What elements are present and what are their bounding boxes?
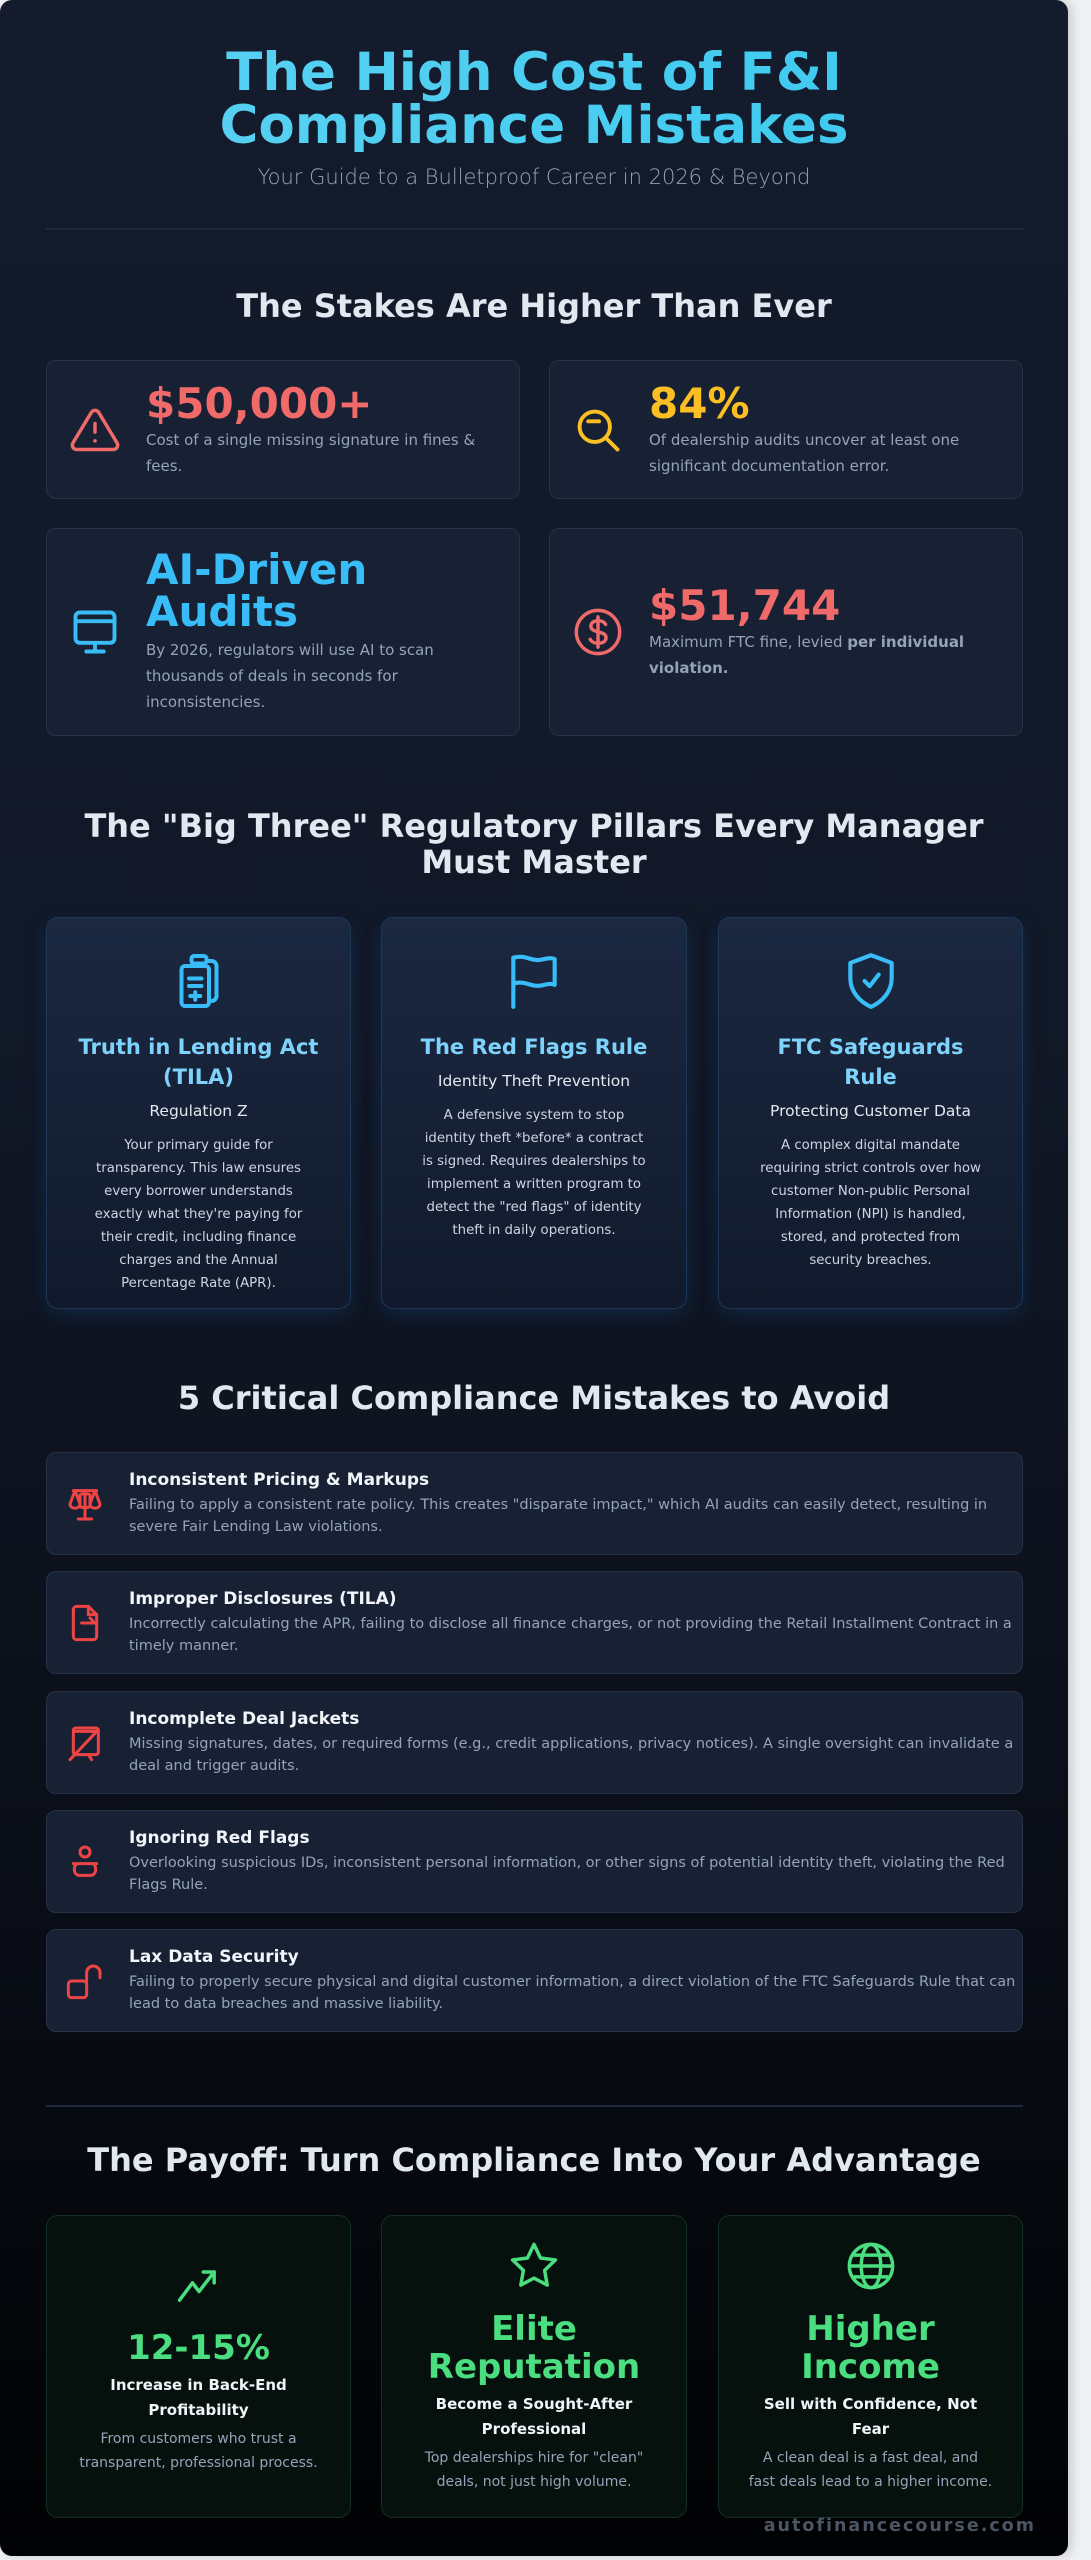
subtitle: Your Guide to a Bulletproof Career in 2026 & Beyond [258,165,810,189]
pillar: red flags: The Red Flags Rule [421,1035,647,1059]
payoff: income: Sell with Confidence, Not [764,2394,977,2412]
heading: payoff: The Payoff: Turn Compliance Into Your Advantage [87,2141,981,2179]
mistake 4: Flags Rule. [129,1877,208,1893]
payoff: reputation: Reputation [428,2346,640,2386]
heading: mistakes: 5 Critical Compliance Mistakes to Avoid [178,1379,890,1417]
payoff: profitability: From customers who trust a [100,2430,297,2446]
icon: person [72,1846,98,1877]
pillar: safeguards: customer Non-public Personal [771,1184,970,1199]
payoff: income: Higher [806,2308,935,2348]
pillar: red flags: detect the "red flags" of identity [427,1200,641,1215]
payoff: reputation: deals, not just high volume. [437,2474,631,2490]
pillar: TILA: Your primary guide for [124,1138,273,1153]
icon: star [510,2242,558,2287]
pillar: TILA: charges and the Annual [119,1253,278,1268]
mistake 3: Incomplete Deal Jackets [129,1709,359,1729]
pillar: safeguards: A complex digital mandate [781,1138,960,1153]
stat card: 84% [549,360,1023,499]
payoff: reputation: Elite [491,2308,577,2348]
stat card: 84%: significant documentation error. [649,456,889,474]
payoff: income: fast deals lead to a higher income. [749,2474,992,2490]
icon: unlocked padlock [66,1964,102,2000]
payoff: profitability: 12-15% [127,2328,270,2368]
stat card: AI audits: inconsistencies. [146,693,265,711]
payoff: reputation: Top dealerships hire for "clean" [425,2450,643,2466]
stat card: 50000 [46,360,520,499]
heading: big three [84,807,984,881]
stat card: 84%: Of dealership audits uncover at least one [649,430,959,448]
pillar: red flags: Identity Theft Prevention [438,1072,630,1090]
mistake 5: Lax Data Security [129,1947,299,1967]
title: The High Cost of F&I [226,42,842,103]
stat card: AI audits: By 2026, regulators will use AI to scan [146,641,434,659]
payoff: reputation: Become a Sought-After [436,2394,632,2412]
icon: dollar [574,608,622,656]
stat card: AI audits [46,528,520,736]
mistake 1 [46,1452,1023,1555]
mistake 3: Missing signatures, dates, or required forms (e.g., credit applications, privacy notices). A single oversight can invalidate a [129,1736,1013,1752]
pillar: safeguards: Protecting Customer Data [770,1102,971,1120]
pillar: TILA: every borrower understands [104,1184,293,1199]
heading: big three: Must Master [421,843,647,881]
mistake 2: Incorrectly calculating the APR, failing to disclose all finance charges, or not providing the Retail Installment Contract in a [129,1616,1012,1632]
pillar: red flags: A defensive system to stop [444,1108,624,1123]
stat card: 50000: Cost of a single missing signature in fines & [146,430,475,448]
stat card: 51744: $51,744 [649,581,840,630]
stat card: AI audits: AI-Driven [146,545,367,594]
pillar: safeguards: Rule [844,1065,897,1089]
stat card: 51744: Maximum FTC fine, levied per individual [649,633,964,651]
icon: crossed doc [68,1726,100,1762]
stat card: 51744 [549,528,1023,736]
pillar: red flags: is signed. Requires dealerships to [422,1154,646,1169]
mistake 4: Overlooking suspicious IDs, inconsistent personal information, or other signs of potential identity theft, violating the Red [129,1855,1005,1871]
mistake 2: timely manner. [129,1638,239,1654]
mistake 2: Improper Disclosures (TILA) [129,1589,397,1609]
mistake 4 [46,1810,1023,1913]
mistake 3: deal and trigger audits. [129,1758,299,1774]
stat card: AI audits: thousands of deals in seconds for [146,667,398,685]
pillar: TILA: (TILA) [163,1065,234,1089]
pillar: safeguards: Information (NPI) is handled, [775,1207,966,1222]
icon: trending [178,2270,216,2302]
mistake 5: lead to data breaches and massive liability. [129,1996,443,2012]
pillar: red flags: implement a written program to [427,1177,641,1192]
pillar: red flags [381,917,687,1309]
icon: globe [848,2242,894,2290]
mistake 1: severe Fair Lending Law violations. [129,1519,383,1535]
payoff: profitability: Increase in Back-End [110,2376,287,2394]
mistake 5 [46,1929,1023,2032]
payoff: income: Fear [852,2420,889,2438]
footer: autofinancecourse.com [764,2516,1036,2536]
payoff: income: A clean deal is a fast deal, and [763,2450,978,2466]
mistake 4: Ignoring Red Flags [129,1828,310,1848]
icon: clipboard [180,954,218,1008]
pillar: safeguards: FTC Safeguards [777,1035,964,1059]
stat card: 51744: violation. [649,659,728,677]
heading: stakes: The Stakes Are Higher Than Ever [236,287,832,325]
pillar: red flags: theft in daily operations. [452,1223,616,1238]
icon: warning [70,408,120,452]
title: Compliance Mistakes [220,95,848,156]
title [0,46,1068,152]
payoff: profitability: Profitability [148,2400,249,2418]
payoff: profitability: transparent, professional process. [79,2454,318,2470]
payoff: reputation: Professional [482,2420,586,2438]
pillar: TILA: exactly what they're paying for [95,1207,302,1222]
stat card: 84%: 84% [649,378,750,428]
payoff: income [718,2215,1023,2518]
heading: big three: The "Big Three" Regulatory Pillars Every Manager [84,807,984,845]
icon: shield [848,953,894,1009]
icon: scales [68,1489,102,1520]
stat card: 50000: $50,000+ [146,378,372,428]
icon: flag [511,954,557,1009]
mistake 1: Failing to apply a consistent rate policy. This creates "disparate impact," which AI audits can easily detect, resulting in [129,1497,987,1513]
pillar: TILA: Truth in Lending Act [79,1035,318,1059]
pillar: safeguards: requiring strict controls over how [760,1161,981,1176]
pillar: TILA: their credit, including finance [101,1230,296,1245]
payoff: reputation [381,2215,687,2518]
pillar: TILA: transparency. This law ensures [96,1161,301,1176]
stat card: AI audits: Audits [146,587,298,636]
stat card: 50000: fees. [146,456,182,474]
mistake 1: Inconsistent Pricing & Markups [129,1470,429,1490]
icon: file [72,1604,98,1642]
mistake 3 [46,1691,1023,1794]
mistake 2 [46,1571,1023,1674]
mistake 5: Failing to properly secure physical and digital customer information, a direct violation of the FTC Safeguards Rule that can [129,1974,1015,1990]
pillar: TILA: Regulation Z [149,1102,248,1120]
pillar: safeguards: stored, and protected from [781,1230,960,1245]
icon: magnifier [578,410,620,452]
icon: monitor [74,610,116,654]
pillar: red flags: identity theft *before* a contract [425,1131,643,1146]
pillar: TILA [46,917,351,1309]
pillar: safeguards: security breaches. [809,1253,932,1268]
payoff: profitability [46,2215,351,2518]
payoff: income: Income [801,2346,940,2386]
pillar: safeguards [718,917,1023,1309]
pillar: TILA: Percentage Rate (APR). [121,1276,276,1291]
